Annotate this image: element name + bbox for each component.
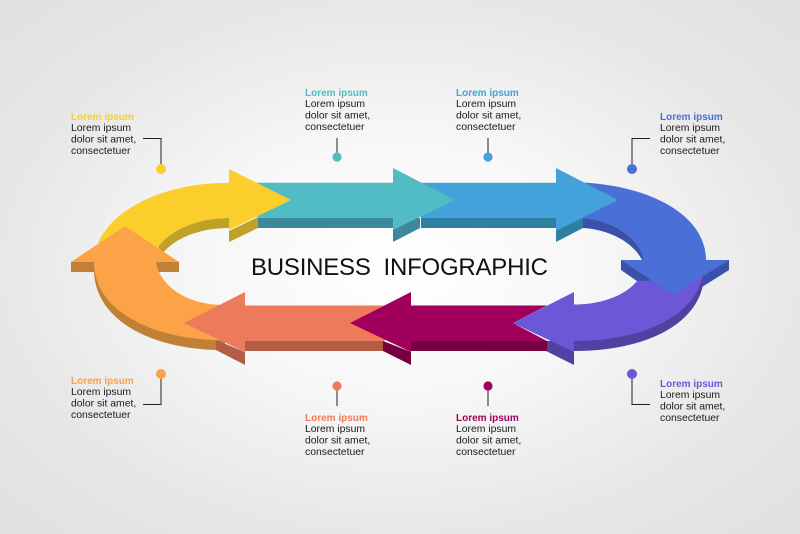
callout: salmon: dolor sit amet, [305,436,370,446]
callout: blue [627,112,725,174]
callout: salmon [305,381,370,458]
callout: teal [305,88,370,162]
callout: maroon [456,381,521,458]
callout: teal: dolor sit amet, [305,110,370,122]
callout: orange [71,369,166,421]
callout: yellow: consectetuer [71,146,131,157]
arrow: blue depth [583,218,729,295]
callout: salmon: Lorem ipsum [305,413,368,424]
callout: orange: consectetuer [71,410,131,421]
callout: blue: consectetuer [660,146,720,157]
arrow: salmon [184,292,385,365]
callout: salmon: consectetuer [305,447,365,458]
callout: light blue [456,88,521,162]
loop of eight arrows [71,168,729,365]
callout: light blue: dolor sit amet, [456,110,521,122]
callout: light blue: Lorem ipsum [456,99,516,110]
arrow: orange [71,226,225,350]
callout: salmon: Lorem ipsum [305,424,365,435]
callout: blue: Lorem ipsum [660,112,723,123]
callout: orange: Lorem ipsum [71,376,134,387]
callout: blue: Lorem ipsum [660,123,720,134]
arrow: maroon [350,292,547,365]
title: BUSINESS INFOGRAPHIC [251,254,548,281]
callout: blue: dolor sit amet, [660,134,725,146]
callout: orange: dolor sit amet, [71,398,136,410]
callout: maroon: Lorem ipsum [456,424,516,435]
callout: yellow: dolor sit amet, [71,134,136,146]
callout: yellow [71,112,166,174]
callout: purple: consectetuer [660,413,720,424]
arrow: teal [245,168,455,242]
callout: purple [627,369,725,424]
arrow: yellow [98,169,291,255]
arrow: blue [570,182,729,295]
callout: yellow: Lorem ipsum [71,112,134,123]
callout: yellow: Lorem ipsum [71,123,131,134]
callout: maroon: consectetuer [456,447,516,458]
callout: maroon: Lorem ipsum [456,413,519,424]
arrow: light blue [410,168,618,242]
callout: purple: dolor sit amet, [660,402,725,412]
callout: teal: Lorem ipsum [305,99,365,110]
callout: orange: Lorem ipsum [71,387,131,398]
callout: light blue: Lorem ipsum [456,88,519,99]
callout: purple: Lorem ipsum [660,390,720,401]
arrow: purple [513,275,703,365]
callout: maroon: dolor sit amet, [456,436,521,446]
callout: teal: Lorem ipsum [305,88,368,99]
callout: teal: consectetuer [305,122,365,133]
callout: purple: Lorem ipsum [660,379,723,390]
callout: light blue: consectetuer [456,122,516,133]
